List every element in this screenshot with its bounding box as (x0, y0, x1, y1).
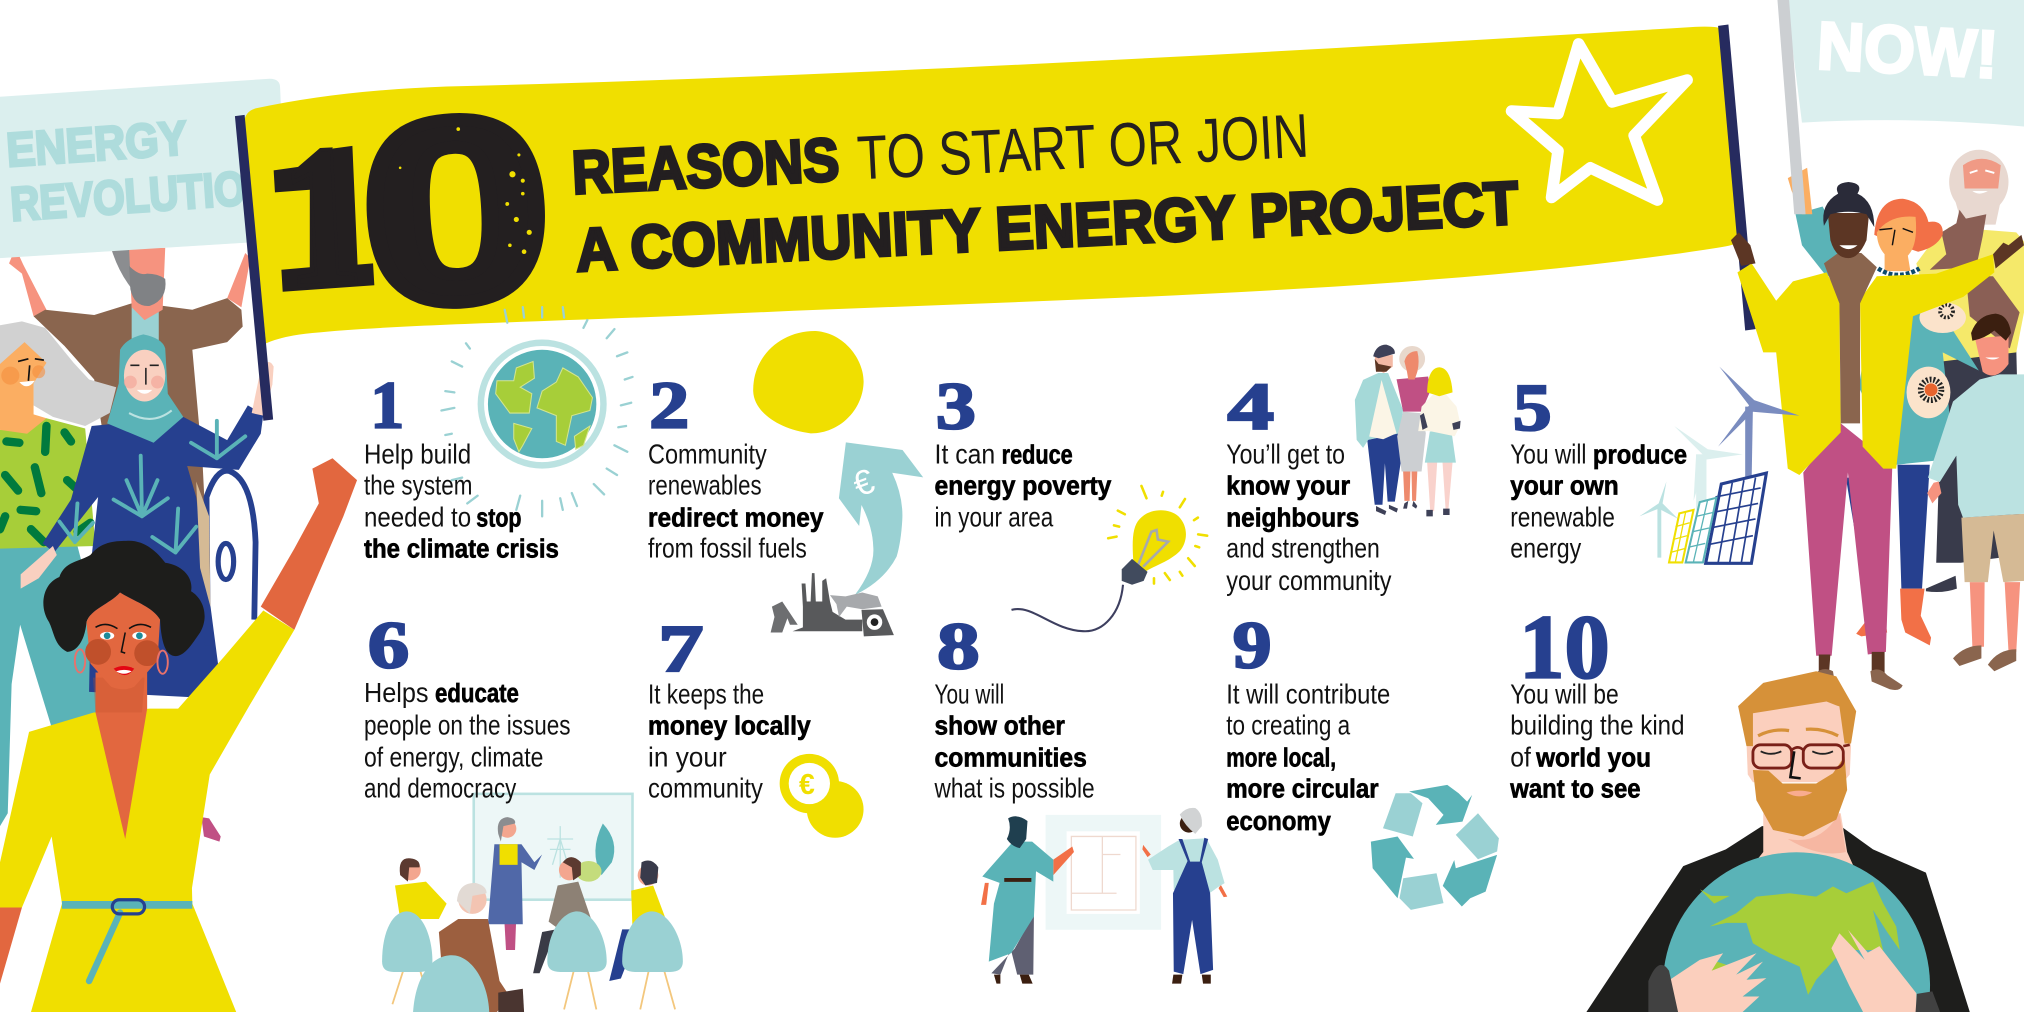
sign: now: NOW! (1815, 8, 2000, 93)
big number 10: 1 (277, 102, 366, 331)
reason 3 text (935, 438, 1112, 533)
illustration: bearded man holding globe (1586, 671, 1970, 1012)
heading line 2: A COMMUNITY ENERGY PROJECT (574, 168, 1520, 284)
reason 9 (1226, 607, 1499, 910)
reason 5 text: your own (1510, 472, 1619, 500)
reason 8 text (934, 678, 1095, 804)
reason 5 text: You will (1510, 438, 1586, 469)
reason 8 text: communities (935, 745, 1087, 773)
reason 3 text: energy poverty (935, 472, 1112, 500)
reason 4 text (1226, 438, 1392, 596)
reason 8 (934, 609, 1227, 984)
reason 7 text: It keeps the (648, 678, 764, 709)
reason 7 text: in your (648, 742, 727, 773)
woman with orange hair (1777, 0, 1979, 645)
reason 5 text: produce (1593, 441, 1687, 469)
reason 2 text: redirect money (648, 505, 824, 533)
reason 1 text: needed to (364, 502, 471, 533)
sign: energy revolution: ENERGY (5, 112, 189, 177)
old man (1916, 150, 2024, 592)
icon: arrow with euro (839, 442, 923, 595)
reason 2 (648, 331, 923, 636)
reason 10 text: building the kind (1510, 709, 1685, 740)
reason 1 (364, 307, 632, 564)
heading line 1 light part: TO START OR JOIN (856, 102, 1310, 193)
number 7: 7 (658, 611, 703, 686)
reason 1 text: stop (476, 505, 521, 533)
reason 6 text (364, 677, 571, 804)
reason 6 text: people on the issues (364, 709, 571, 740)
number 9: 9 (1233, 607, 1271, 682)
reason 3 text: It can (935, 438, 995, 469)
reason 1 text: the climate crisis (364, 536, 559, 564)
icon: arrow with euro: € (848, 461, 879, 505)
pole: right (1718, 25, 1756, 330)
reason 10 (1509, 596, 1685, 804)
reason 9 text: It will contribute (1226, 678, 1390, 709)
reason 10 text: want to see (1509, 776, 1641, 804)
illustration: wind turbines and solar panels (1639, 367, 1799, 563)
reason 8 text: You will (935, 678, 1004, 709)
reason 3 text: reduce (1002, 441, 1073, 469)
reason 4 text: know your (1226, 472, 1350, 500)
number 3: 3 (936, 369, 976, 444)
number 8: 8 (937, 609, 980, 684)
number 2: 2 (649, 367, 689, 442)
reason 10 text (1509, 678, 1685, 804)
reason 5 (1510, 367, 1799, 564)
woman in yellow jacket (1731, 182, 2024, 690)
reason 9 text: more local, (1226, 745, 1336, 773)
reason 8 text: show other (935, 712, 1065, 740)
reason 9 text: to creating a (1226, 709, 1351, 740)
icon: euro coins: € (799, 769, 815, 801)
illustration: right crowd (1731, 0, 2024, 690)
reason 8 text: what is possible (934, 773, 1095, 804)
reason 3 text: in your area (935, 502, 1054, 533)
reason 4 text: and strengthen (1226, 533, 1380, 564)
reason 9 text: economy (1226, 808, 1331, 836)
icon: star (1512, 44, 1687, 200)
reason 5 text: energy (1510, 533, 1581, 564)
yellow blob (753, 331, 864, 433)
heading line 1: REASONS (570, 125, 841, 207)
illustration: three neighbours (1355, 345, 1461, 516)
illustration: man with beard holding sign (9, 248, 250, 671)
reason 2 text (648, 438, 824, 564)
reason 5 text: renewable (1510, 502, 1615, 533)
reason 1 text: Help build (364, 438, 471, 469)
illustration: woman raising arm in yellow dress (0, 458, 357, 1012)
pole: left (235, 115, 273, 421)
chairs and audience (382, 857, 683, 1012)
reason 6 text: and democracy (364, 773, 516, 804)
number 5: 5 (1513, 370, 1552, 445)
sign: energy revolution: REVOLUTION (9, 160, 276, 232)
banner: yellow flag (244, 27, 1741, 343)
reason 10 text: world you (1535, 745, 1651, 773)
reason 7 text: community (648, 773, 763, 804)
title (274, 61, 1520, 360)
reason 5 text (1510, 438, 1687, 564)
reason 7 (648, 611, 864, 838)
icon: euro coins (780, 754, 864, 838)
illustration: two people at floor plan board (981, 808, 1227, 984)
illustration: protester with grey hair (0, 321, 116, 826)
icon: light bulb with cord (1011, 486, 1207, 631)
reason 9 text (1226, 678, 1390, 836)
illustration: workshop scene (382, 794, 683, 1012)
reason 10 text: of (1510, 742, 1531, 773)
reason 7 text: money locally (648, 712, 811, 740)
reason 6 (364, 607, 683, 1012)
reason 10 text: You will be (1510, 678, 1619, 709)
reason 7 text (648, 678, 811, 804)
reason 9 text: more circular (1226, 776, 1379, 804)
sign: now (1786, 0, 2024, 126)
sign: energy revolution (0, 79, 287, 258)
boy (1927, 314, 2024, 671)
reason 4 text: neighbours (1226, 505, 1359, 533)
reason 4 (1226, 345, 1461, 596)
big number 10 (274, 61, 558, 360)
reason 2 text: from fossil fuels (648, 533, 807, 564)
number 10: 10 (1519, 596, 1610, 698)
icon: recycle (1371, 785, 1499, 910)
reason 4 text: You’ll get to (1226, 438, 1345, 469)
number 4: 4 (1228, 369, 1274, 444)
reason 6 text: educate (435, 680, 519, 708)
icon: factory and nuclear (771, 573, 894, 636)
reason 4 text: your community (1226, 565, 1392, 596)
reason 1 text (364, 438, 559, 564)
reason 3 (935, 369, 1207, 631)
reason 1 text: the system (364, 469, 472, 500)
big number 10: 0 (354, 61, 558, 360)
illustration: woman in hijab and blue dress (21, 334, 274, 698)
number 6: 6 (368, 607, 409, 682)
reason 6 text: Helps (364, 677, 429, 708)
reason 2 text: renewables (648, 469, 762, 500)
reason 2 text: Community (648, 438, 767, 469)
number 1: 1 (370, 367, 404, 442)
reason 6 text: of energy, climate (364, 742, 543, 773)
icon: earth with rays (441, 307, 632, 516)
